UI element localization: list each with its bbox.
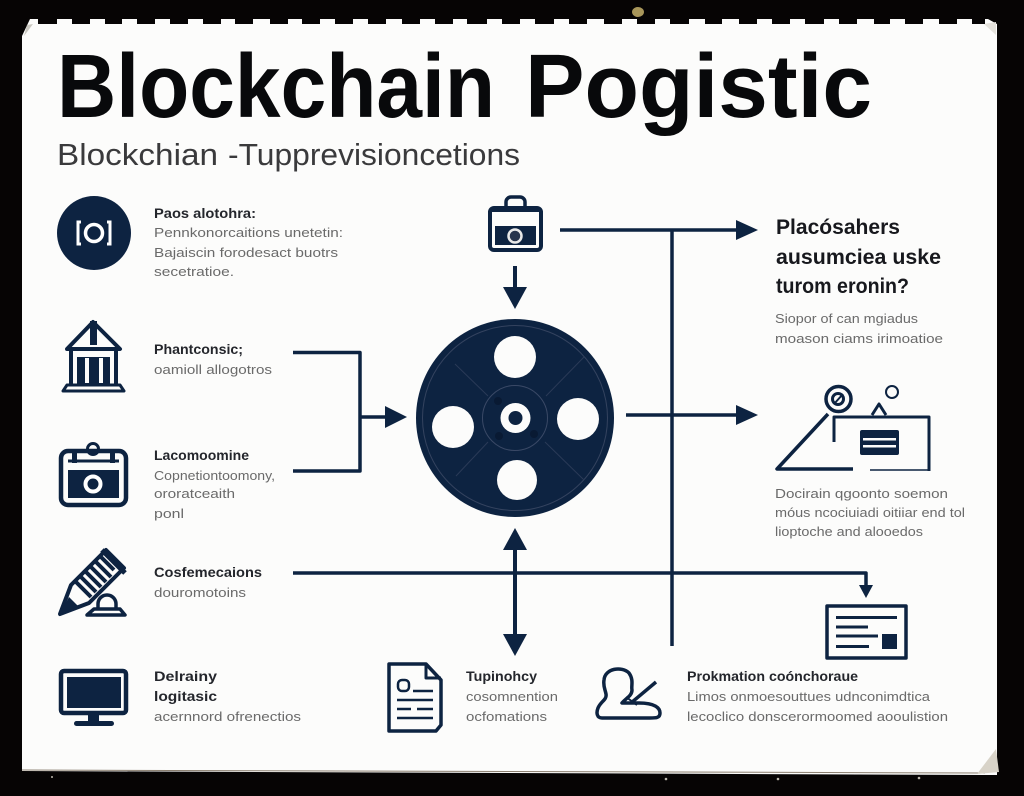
icon: camera badge	[57, 196, 131, 270]
text block: item 5: Delrainy	[154, 669, 218, 684]
icon: camera bag	[490, 197, 541, 250]
icon: monitor	[61, 671, 126, 726]
text block: bottom right: Prokmation coónchoraue	[687, 669, 859, 684]
text block: item 4: douromotoins	[154, 585, 247, 600]
title	[57, 37, 872, 137]
icon: calendar camera	[61, 444, 126, 505]
icon: document card	[827, 606, 906, 658]
icon: bank building	[63, 321, 124, 391]
text block: item 1: Bajaiscin forodesact buotrs	[154, 245, 339, 260]
text block: right heading: Placósahers	[776, 216, 900, 239]
title: Blockchain	[57, 37, 495, 137]
subtitle: -Tupprevisioncetions	[228, 137, 520, 172]
text block: bottom middle: cosomnention	[466, 689, 558, 704]
text block: item 2	[154, 342, 273, 377]
text block: right middle: móus ncociuiadi oitiiar end tol	[775, 505, 965, 520]
text block: item 3: ororatceaith	[154, 486, 235, 501]
arrow: wheel to middle right	[626, 405, 758, 425]
text block: item 4	[154, 565, 262, 600]
text block: right middle: Docirain qgoonto soemon	[775, 486, 948, 501]
text block: bottom middle	[466, 669, 558, 724]
text block: right heading: turom eronin?	[776, 275, 909, 298]
text block: item 2: Phantconsic;	[154, 342, 243, 357]
text block: item 1: secetratioe.	[154, 264, 234, 279]
dust specks	[51, 776, 920, 780]
text block: item 3: ponl	[154, 506, 184, 521]
text block: bottom middle: ocfomations	[466, 709, 548, 724]
arrow: long line to document	[293, 573, 873, 598]
icon: person signing	[597, 669, 660, 718]
text block: item 2: oamioll allogotros	[154, 362, 273, 377]
icon: pen and stamp	[60, 550, 125, 615]
arrow: bag line to top right	[560, 220, 758, 646]
text block: right heading: Siopor of can mgiadus	[775, 311, 919, 326]
brass pin	[632, 7, 644, 17]
central wheel	[416, 319, 614, 517]
subtitle	[57, 137, 520, 172]
text block: right heading	[775, 216, 943, 346]
text block: item 4: Cosfemecaions	[154, 565, 262, 580]
text block: right middle: lioptoche and alooedos	[775, 524, 924, 539]
icon: magnifier and board	[777, 386, 929, 471]
text block: item 3: Lacomoomine	[154, 448, 250, 463]
text block: bottom right: lecoclico donscerormoomed aooulistion	[687, 709, 948, 724]
icon: document page	[389, 664, 441, 731]
arrow: double headed vertical	[503, 528, 527, 656]
text block: bottom right	[687, 669, 948, 724]
text block: item 3: Copnetiontoomony,	[154, 468, 275, 483]
text block: item 5	[154, 669, 302, 724]
text block: item 5: logitasic	[154, 689, 218, 704]
text block: item 1: Paos alotohra:	[154, 206, 256, 221]
text block: item 5: acernnord ofrenectios	[154, 709, 302, 724]
text block: right middle	[775, 486, 965, 539]
text block: bottom right: Limos onmoesouttues udnconimdtica	[687, 689, 931, 704]
text block: bottom middle: Tupinohcy	[466, 669, 538, 684]
title: Pogistic	[525, 37, 872, 137]
text block: right heading: ausumciea uske	[776, 246, 941, 269]
subtitle: Blockchian	[57, 137, 218, 172]
arrow: bag to wheel	[503, 266, 527, 309]
text block: item 1	[154, 206, 343, 279]
connector: left bracket	[293, 352, 407, 471]
text block: item 3	[154, 448, 275, 521]
text block: right heading: moason ciams irimoatioe	[775, 331, 943, 346]
text block: item 1: Pennkonorcaitions unetetin:	[154, 225, 343, 240]
